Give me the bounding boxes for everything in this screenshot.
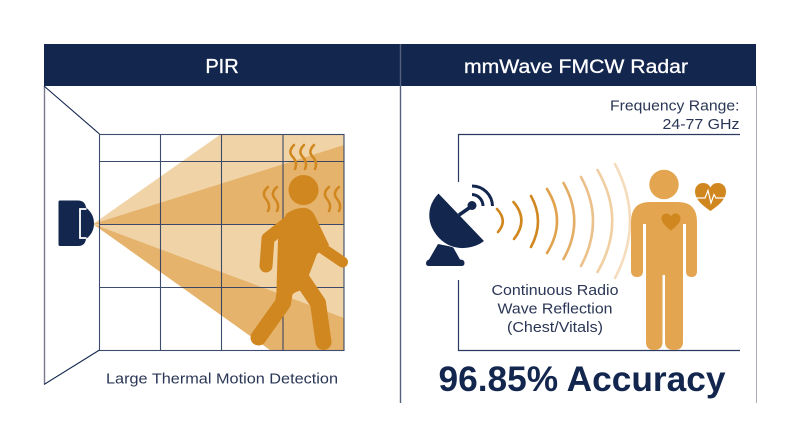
frequency range label: Frequency Range: [610,98,740,114]
icon: standing person [631,170,697,350]
icon: walking person with heat [258,145,342,342]
panel: PIR [44,86,344,388]
radar frame [458,134,740,350]
header bar: PIR: PIR [205,56,239,78]
panel: mmWave radar [426,98,740,399]
sensor beam cone [93,134,344,350]
icon: heart with pulse [695,183,726,211]
wave reflection caption: Continuous Radio [492,283,618,299]
accuracy figure: 96.85% Accuracy [438,360,726,399]
wave reflection caption: Wave Reflection [498,302,612,318]
panel divider and right border [400,44,756,403]
radio waves [497,164,630,278]
wave reflection caption [492,283,618,336]
room grid [100,134,344,350]
header bar: mmWave FMCW Radar [401,44,756,86]
icon: chest heart [662,214,680,230]
wave reflection caption: (Chest/Vitals) [507,320,603,336]
header bar: PIR [44,44,400,86]
icon: radar dish [426,186,492,266]
icon: PIR sensor [58,200,94,246]
frequency range label: 24-77 GHz [662,116,740,133]
caption: PIR: Large Thermal Motion Detection [106,372,338,388]
header bar: mmWave FMCW Radar: mmWave FMCW Radar [464,56,689,78]
frequency range label [610,98,740,133]
room walls [44,86,100,384]
